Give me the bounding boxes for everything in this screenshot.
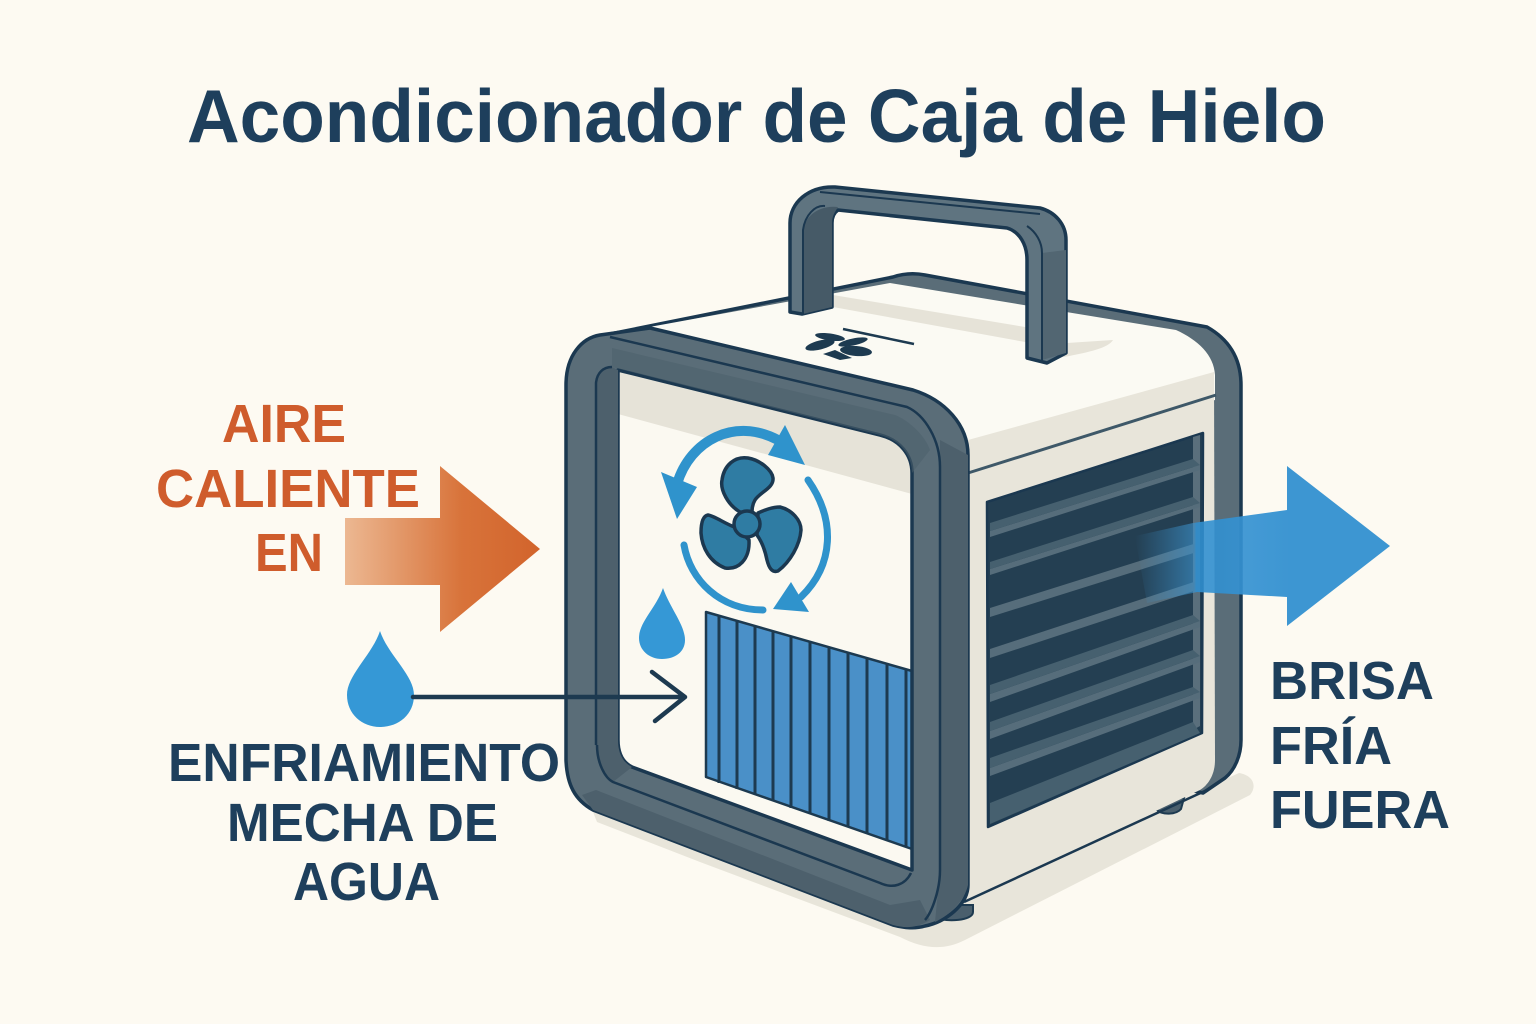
cold breeze label: FRÍA [1270, 716, 1392, 776]
side lower edge [964, 790, 1207, 902]
water wick panel [706, 612, 912, 849]
feet [938, 798, 1184, 920]
side seam line [968, 395, 1216, 473]
circulation arcs [677, 431, 827, 610]
icon: water drop with pointer arrow [347, 631, 685, 727]
handle right shade [1042, 250, 1066, 360]
hot air label: AIRE [222, 394, 346, 454]
icon: inner water drop [639, 588, 685, 659]
fan blades [701, 458, 801, 571]
handle [790, 187, 1066, 363]
back rim [600, 274, 1241, 793]
frame inner lines [596, 337, 940, 920]
handle left shade [803, 207, 838, 314]
cold breeze arrow [1135, 466, 1390, 626]
title: Acondicionador de Caja de Hielo [187, 74, 1326, 158]
hot air label: EN [255, 523, 323, 583]
fan hub [734, 511, 760, 537]
slats [990, 465, 1200, 776]
window shade band [618, 370, 912, 494]
ice box cooler unit [566, 187, 1241, 928]
right slat ends [1193, 435, 1200, 730]
cold breeze label: BRISA [1270, 651, 1434, 711]
cold breeze label: FUERA [1270, 780, 1450, 840]
frame shading [582, 348, 968, 927]
side face [968, 372, 1215, 900]
water wick label: MECHA DE [227, 793, 498, 853]
front window panel [618, 370, 912, 870]
ground shadow [593, 773, 1254, 947]
top face [600, 283, 1215, 473]
water wick label [168, 733, 560, 912]
arrowheads [661, 425, 809, 612]
water wick label: AGUA [293, 852, 440, 912]
slat shaded tops [990, 459, 1200, 824]
hot air label: CALIENTE [156, 459, 420, 519]
front frame [566, 328, 968, 928]
water wick label: ENFRIAMIENTO [168, 733, 560, 793]
handle inner lines [803, 192, 1042, 361]
hot air label [156, 394, 420, 583]
hot air arrow [345, 466, 540, 632]
top fan icon [804, 329, 914, 360]
handle shadow on top [833, 295, 1113, 357]
louver vent panel [987, 433, 1203, 827]
cold breeze label [1270, 651, 1450, 840]
fan with circulation arrows [661, 425, 827, 612]
pointer arrow [413, 672, 685, 721]
